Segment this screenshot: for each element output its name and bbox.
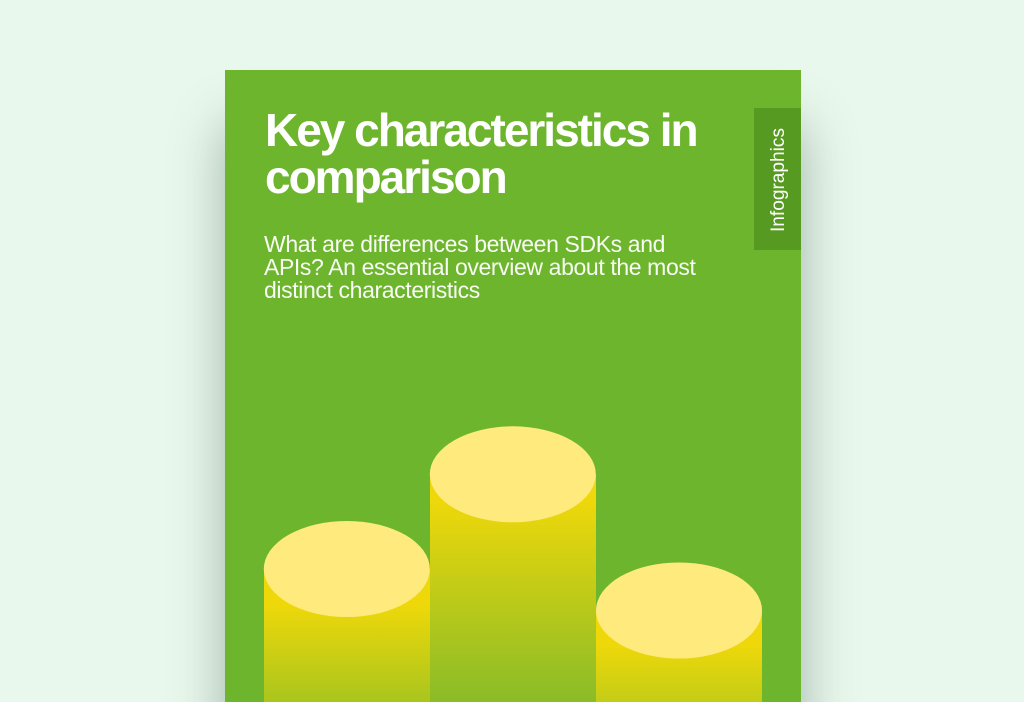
tab label: Infographics: Infographics xyxy=(768,128,789,232)
subtitle text: distinct characteristics xyxy=(264,277,480,303)
cylinder: middle xyxy=(430,426,596,702)
cylinder: right xyxy=(596,562,762,702)
panel: green card xyxy=(225,70,801,702)
subtitle text xyxy=(264,231,696,303)
tab label: Infographics xyxy=(754,108,801,250)
subtitle text: What are differences between SDKs and xyxy=(264,231,665,257)
title: comparison xyxy=(265,150,506,202)
title: Key characteristics in xyxy=(265,104,697,156)
cylinder: left xyxy=(264,521,430,702)
subtitle text: APIs? An essential overview about the most xyxy=(264,254,696,280)
title xyxy=(265,104,697,202)
